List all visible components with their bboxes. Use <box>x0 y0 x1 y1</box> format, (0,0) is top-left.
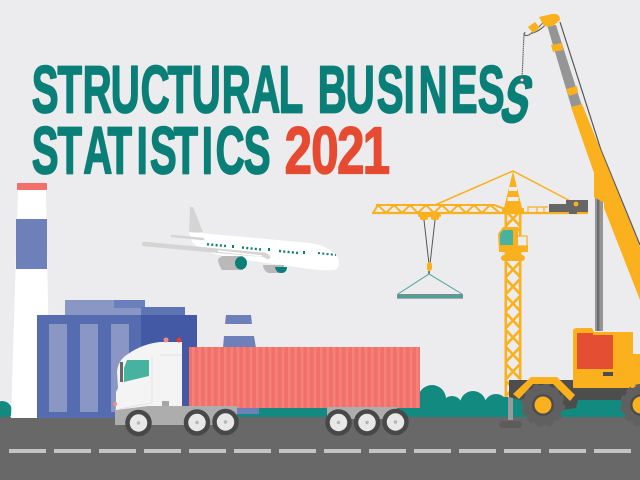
crane base <box>499 397 522 428</box>
mobile crane <box>509 14 640 425</box>
crane cab <box>573 328 640 388</box>
chassis <box>509 380 640 410</box>
step <box>162 401 169 406</box>
lane markings <box>9 449 631 453</box>
rear wheel <box>622 386 640 424</box>
plane windows <box>207 244 336 255</box>
boom pulley arm <box>524 20 547 36</box>
roof lights <box>164 338 168 342</box>
boom cable <box>560 22 640 245</box>
hook cable <box>522 33 524 80</box>
tower crane <box>372 171 588 428</box>
factory chimney <box>11 183 50 418</box>
hook eyelet on letter S <box>520 78 524 82</box>
boom head and bands <box>528 14 578 96</box>
cab window <box>124 360 149 382</box>
title line 1: S <box>494 62 540 136</box>
front wheel <box>523 385 563 425</box>
road <box>0 417 640 480</box>
trolley and cables <box>418 214 441 274</box>
title line 2 <box>32 113 390 188</box>
suspended beam <box>397 274 463 299</box>
fender <box>513 377 575 401</box>
wheels <box>128 411 406 434</box>
truck chassis <box>115 406 397 425</box>
lower boom <box>571 104 640 300</box>
shipping container <box>189 347 420 408</box>
column <box>595 195 603 331</box>
jib <box>372 171 588 213</box>
mast <box>504 171 522 397</box>
second chimney <box>223 315 259 414</box>
airplane <box>144 207 339 273</box>
counterweight <box>549 200 588 214</box>
operator cab <box>498 227 528 261</box>
tree line <box>0 385 640 421</box>
truck <box>113 338 420 434</box>
factory building <box>37 300 197 418</box>
title line 1: BUSINES <box>318 52 505 127</box>
title line 1: STRUCTURAL <box>32 52 303 127</box>
title line 2: 2021 <box>285 114 390 188</box>
wheel hubs <box>137 420 397 425</box>
title line 1 <box>32 52 540 136</box>
title <box>32 52 540 188</box>
truck cab <box>113 338 182 410</box>
upper boom <box>547 25 582 109</box>
title line 2: STATISTICS <box>32 113 271 188</box>
